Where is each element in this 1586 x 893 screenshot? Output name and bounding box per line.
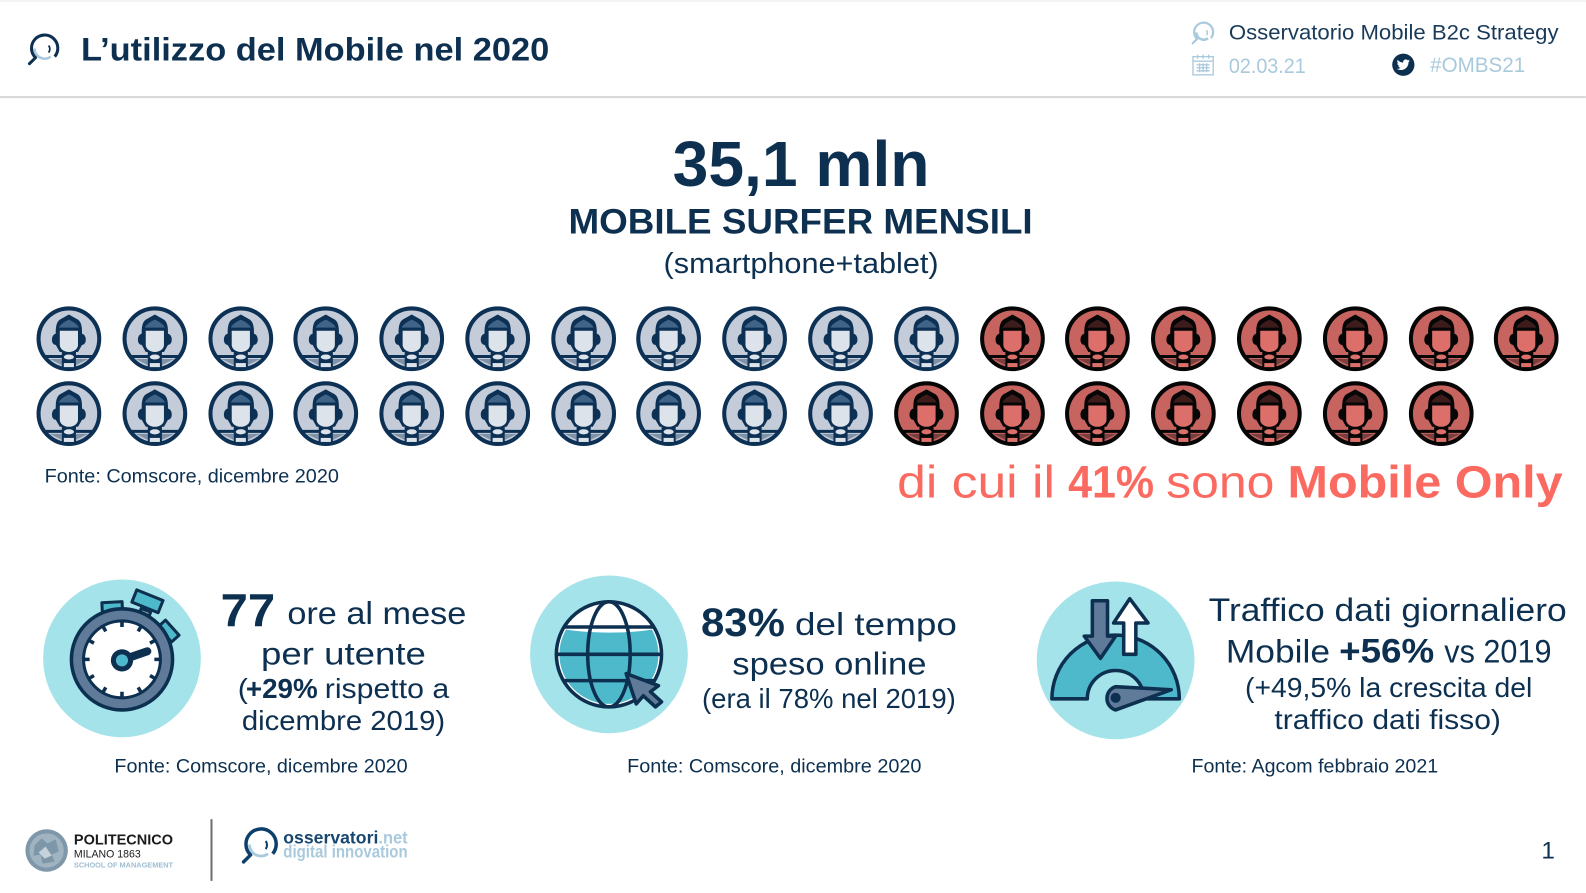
logo: osservatori wordmark: digital innovation (283, 842, 408, 862)
source: surfers: Fonte: Comscore, dicembre 2020 (45, 466, 339, 487)
callout: mobile only (897, 457, 1563, 508)
pictogram: row 1 blue users (39, 308, 957, 369)
hashtag: #OMBS21 (1430, 54, 1525, 77)
header divider (0, 96, 1586, 98)
stat: hours per user: rispetto a (325, 673, 450, 704)
stat: daily data traffic: traffico dati fisso) (1274, 704, 1501, 735)
stat: hours per user: dicembre 2019) (242, 705, 445, 736)
source: data traffic: Fonte: Agcom febbraio 2021 (1191, 757, 1438, 778)
stat: time online: 83% (701, 601, 785, 645)
headline note: (smartphone+tablet) (664, 247, 939, 279)
icon: title magnifier (29, 35, 58, 64)
stat: time online: del tempo (795, 607, 957, 642)
stat: daily data traffic: vs 2019 (1444, 633, 1551, 669)
stat: daily data traffic (1209, 592, 1567, 735)
stat: time online: speso online (732, 647, 926, 682)
stat: daily data traffic: Mobile (1226, 633, 1330, 669)
callout: mobile only: sono (1166, 457, 1274, 508)
stat: daily data traffic: +56% (1339, 632, 1434, 670)
stat: hours per user: ore al mese (287, 596, 466, 631)
stat: time online (701, 601, 957, 714)
logo: osservatori wordmark: osservatori (283, 827, 378, 847)
icon: twitter (1392, 54, 1414, 76)
top edge shading (0, 0, 1586, 2)
icon: stopwatch (43, 579, 201, 737)
pictogram: row 2 blue users (39, 383, 871, 444)
source: hours: Fonte: Comscore, dicembre 2020 (114, 757, 408, 778)
logo: Politecnico seal (25, 829, 68, 872)
stat: hours per user: ( (238, 673, 248, 704)
callout: mobile only: 41% (1068, 457, 1154, 508)
logo: Politecnico wordmark: SCHOOL OF MANAGEMENT (74, 861, 173, 870)
icon: observatory magnifier (1193, 23, 1213, 43)
stat: hours per user: +29% (246, 673, 318, 704)
stat: hours per user: per utente (261, 636, 426, 671)
stat: daily data traffic: (+49,5% la crescita del (1245, 672, 1532, 703)
icon: speedometer with arrows (1037, 582, 1194, 739)
icon: calendar (1193, 55, 1213, 75)
stat: hours per user (221, 584, 466, 736)
logo: Politecnico wordmark: MILANO 1863 (74, 849, 141, 861)
stat: hours per user: 77 (221, 584, 275, 636)
logo: Politecnico wordmark: POLITECNICO (74, 831, 173, 848)
headline number: 35,1 mln (673, 128, 930, 200)
pictogram: row 2 red users (896, 383, 1472, 444)
observatory name: Osservatorio Mobile B2c Strategy (1229, 21, 1559, 44)
stat: time online: (era il 78% nel 2019) (702, 683, 956, 714)
pictogram: row 1 red users (982, 308, 1557, 369)
logo: osservatori icon (244, 829, 276, 862)
title: L’utilizzo del Mobile nel 2020 (81, 32, 549, 68)
page number: 1 (1541, 838, 1555, 865)
logo: osservatori wordmark (283, 827, 408, 862)
header info block (1193, 21, 1559, 78)
stat: daily data traffic: Traffico dati giornaliero (1209, 592, 1567, 628)
callout: mobile only: Mobile Only (1288, 457, 1563, 508)
date: 02.03.21 (1229, 55, 1306, 78)
callout: mobile only: di cui il (897, 457, 1055, 508)
source: time online: Fonte: Comscore, dicembre 2020 (627, 757, 921, 778)
headline label: MOBILE SURFER MENSILI (568, 203, 1033, 242)
icon: globe with cursor (530, 575, 688, 733)
logo: osservatori wordmark: .net (378, 827, 408, 847)
logo: Politecnico wordmark (74, 831, 173, 870)
